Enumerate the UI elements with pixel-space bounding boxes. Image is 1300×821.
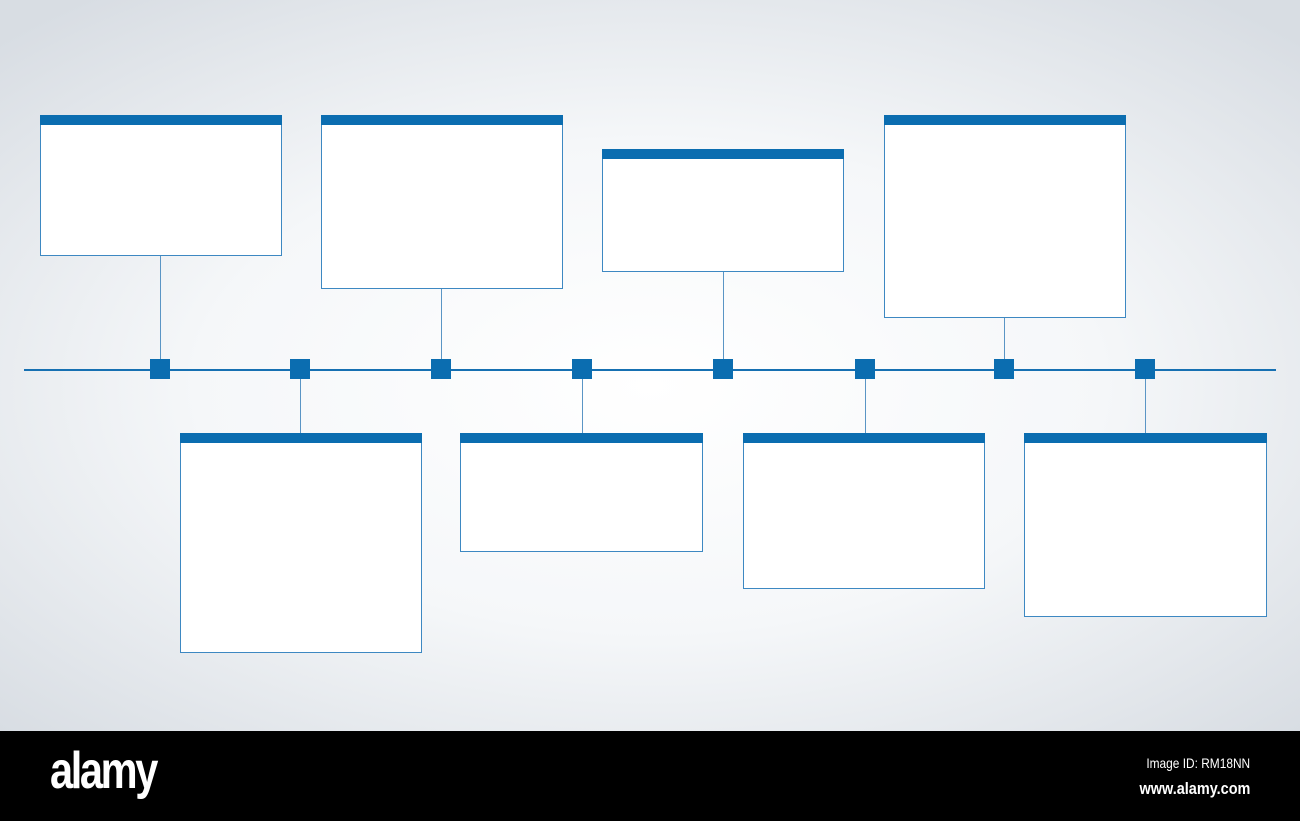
marker 1 <box>150 359 170 379</box>
marker 6 <box>855 359 875 379</box>
connector: card 2 <box>441 288 442 359</box>
connector: card 8 <box>1145 379 1146 433</box>
marker 4 <box>572 359 592 379</box>
connector: card 1 <box>160 255 161 359</box>
connector: card 4 <box>1004 317 1005 359</box>
footer image id: Image ID: RM18NN <box>1146 755 1250 771</box>
footer url: www.alamy.com <box>1139 779 1250 798</box>
card 8 <box>1024 433 1267 617</box>
timeline axis <box>24 369 1276 371</box>
connector: card 7 <box>865 379 866 433</box>
card 4 <box>884 115 1126 318</box>
card 2 <box>321 115 563 289</box>
connector: card 5 <box>300 379 301 433</box>
marker 3 <box>431 359 451 379</box>
card 6 <box>460 433 703 552</box>
connector: card 6 <box>582 379 583 433</box>
marker 8 <box>1135 359 1155 379</box>
card 5 <box>180 433 422 653</box>
marker 7 <box>994 359 1014 379</box>
footer bar <box>0 731 1300 821</box>
card 3 <box>602 149 844 272</box>
card 7 <box>743 433 985 589</box>
connector: card 3 <box>723 271 724 359</box>
card 1 <box>40 115 282 256</box>
marker 5 <box>713 359 733 379</box>
footer logo: alamy <box>50 742 156 800</box>
marker 2 <box>290 359 310 379</box>
